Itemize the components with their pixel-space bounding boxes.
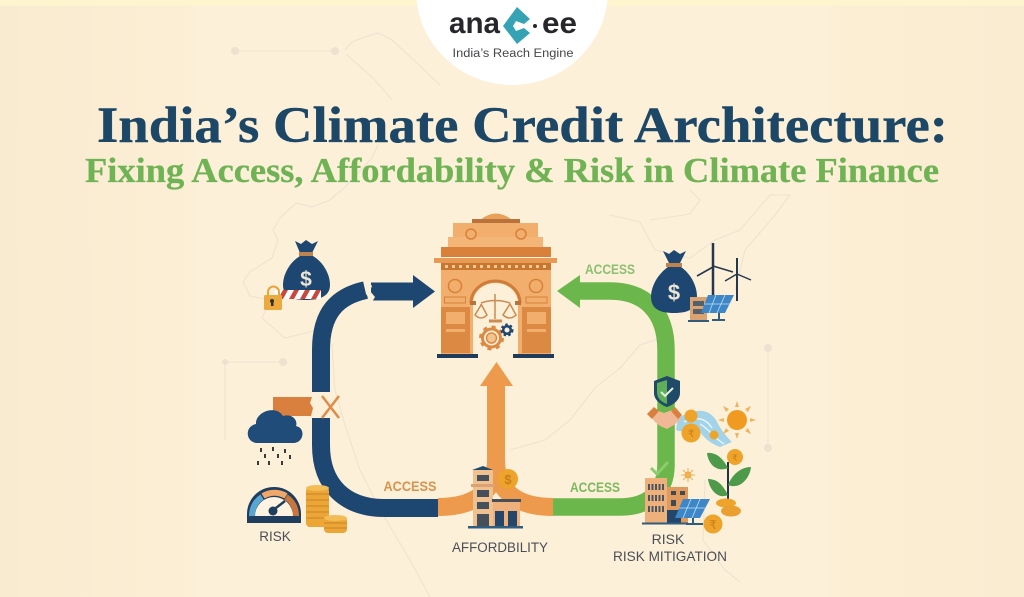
arrow: green access path bbox=[553, 275, 666, 507]
striped barrier bbox=[275, 290, 321, 299]
icon: India Gate with scales and gears bbox=[434, 214, 557, 358]
icon: affordable buildings with coin bbox=[468, 466, 523, 528]
icon: sun bbox=[718, 401, 756, 439]
label: access orange: ACCESS bbox=[384, 478, 436, 494]
label: risk and risk mitigation: RISK MITIGATION bbox=[613, 548, 727, 564]
title: India’s Climate Credit Architecture: bbox=[97, 98, 948, 154]
icon: money plant bbox=[704, 449, 751, 534]
icon: water flow with coins: ₹ bbox=[688, 429, 694, 440]
icon: money bag with wind and solar bbox=[651, 243, 751, 322]
icon: locked money bag: $ bbox=[300, 268, 312, 291]
icon: water flow with coins bbox=[676, 410, 732, 447]
icon: green building with solar panel bbox=[642, 462, 710, 524]
icon: money bag with wind and solar: $ bbox=[668, 280, 680, 305]
logo wordmark bbox=[449, 7, 577, 44]
icon: broken orange brick and cross bbox=[273, 396, 339, 418]
icon: wind turbines bbox=[697, 243, 751, 301]
logo tagline: India’s Reach Engine bbox=[452, 48, 574, 60]
padlock bbox=[264, 286, 282, 310]
logo badge bbox=[416, 0, 608, 85]
arrow break: navy top crack bbox=[363, 280, 375, 302]
arrow: orange affordability path bbox=[438, 362, 553, 507]
icon: shield with check bbox=[654, 376, 680, 407]
arrow: navy blocked access path bbox=[321, 275, 438, 508]
icon: scales of justice bbox=[475, 294, 516, 321]
icon: storm cloud bbox=[248, 410, 302, 465]
label: access green top: ACCESS bbox=[585, 261, 635, 277]
icon: gears bbox=[480, 324, 512, 349]
icon: affordable buildings with coin: $ bbox=[504, 472, 512, 487]
icon: handshake bbox=[647, 407, 682, 429]
logo wordmark: ana bbox=[449, 7, 500, 40]
label: risk: RISK bbox=[259, 529, 291, 544]
subtitle: Fixing Access, Affordability & Risk in Climate Finance bbox=[85, 151, 939, 190]
icon: money plant: ₹ bbox=[709, 518, 717, 532]
logo wordmark: ee bbox=[542, 7, 577, 40]
label: risk and risk mitigation: RISK bbox=[652, 531, 685, 547]
icon: locked money bag bbox=[264, 240, 330, 310]
label: affordbility: AFFORDBILITY bbox=[452, 540, 548, 555]
label: risk and risk mitigation bbox=[613, 531, 727, 564]
label: access green bottom: ACCESS bbox=[570, 479, 620, 495]
icon: money plant: ₹ bbox=[732, 453, 738, 463]
icon: risk gauge bbox=[247, 487, 301, 523]
icon: coin stacks bbox=[306, 485, 347, 533]
